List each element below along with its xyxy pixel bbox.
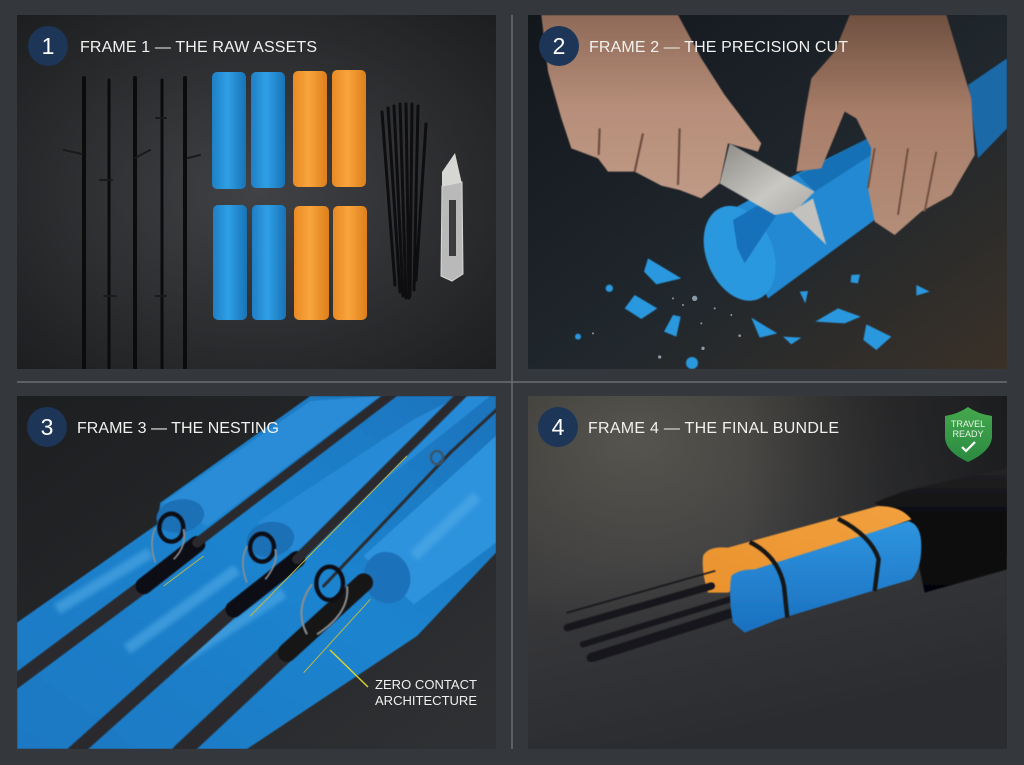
rods (14, 393, 497, 753)
foam crumbs (575, 258, 930, 369)
icon: travel ready shield (945, 407, 992, 462)
orange foam (703, 506, 911, 593)
icon: knife blade (720, 143, 826, 245)
foam noodle (690, 58, 1007, 312)
rods bundle (567, 571, 741, 658)
foam highlights (57, 496, 477, 663)
foam: orange pieces (293, 70, 367, 320)
cable ties (750, 519, 879, 618)
icon: utility knife (441, 153, 463, 281)
panel: frame 3 nesting (14, 393, 497, 753)
panel: frame 1 raw assets (17, 15, 496, 369)
black tube (875, 468, 1007, 593)
step badge 2 and title: FRAME 2 — THE PRECISION CUT (589, 39, 848, 56)
icon: travel ready shield: TRAVEL (951, 419, 985, 429)
step badge 2 and title (539, 26, 848, 66)
rod guides (152, 451, 443, 634)
icon: fishing rod sections (64, 78, 200, 368)
step badge 2 and title: 2 (553, 33, 565, 59)
callout: zero contact architecture: ARCHITECTURE (375, 693, 477, 708)
light beam (528, 396, 819, 586)
foam: blue pieces (212, 72, 286, 320)
foam specks (592, 296, 741, 359)
step badge 4 and title (538, 407, 839, 447)
step badge 1 and title: FRAME 1 — THE RAW ASSETS (80, 39, 317, 56)
step badge 3 and title: 3 (41, 414, 53, 440)
yellow lines (164, 456, 407, 673)
step badge 3 and title: FRAME 3 — THE NESTING (77, 420, 279, 437)
icon: left hand (541, 15, 761, 198)
icon: travel ready shield: READY (952, 429, 984, 439)
leader line (330, 650, 368, 687)
panel: frame 4 final bundle (528, 396, 1007, 749)
icon: cable ties (382, 104, 426, 298)
step badge 4 and title: FRAME 4 — THE FINAL BUNDLE (588, 420, 839, 437)
blue foam (730, 521, 921, 633)
callout: zero contact architecture: ZERO CONTACT (375, 677, 477, 692)
callout: zero contact architecture (375, 680, 477, 705)
step badge 1 and title (28, 26, 317, 66)
step badge 3 and title (27, 407, 279, 447)
step badge 1 and title: 1 (42, 33, 54, 59)
icon: right hand (796, 15, 975, 235)
panel: frame 2 precision cut (528, 15, 1007, 369)
step badge 4 and title: 4 (552, 414, 565, 440)
foam channels (17, 396, 496, 749)
